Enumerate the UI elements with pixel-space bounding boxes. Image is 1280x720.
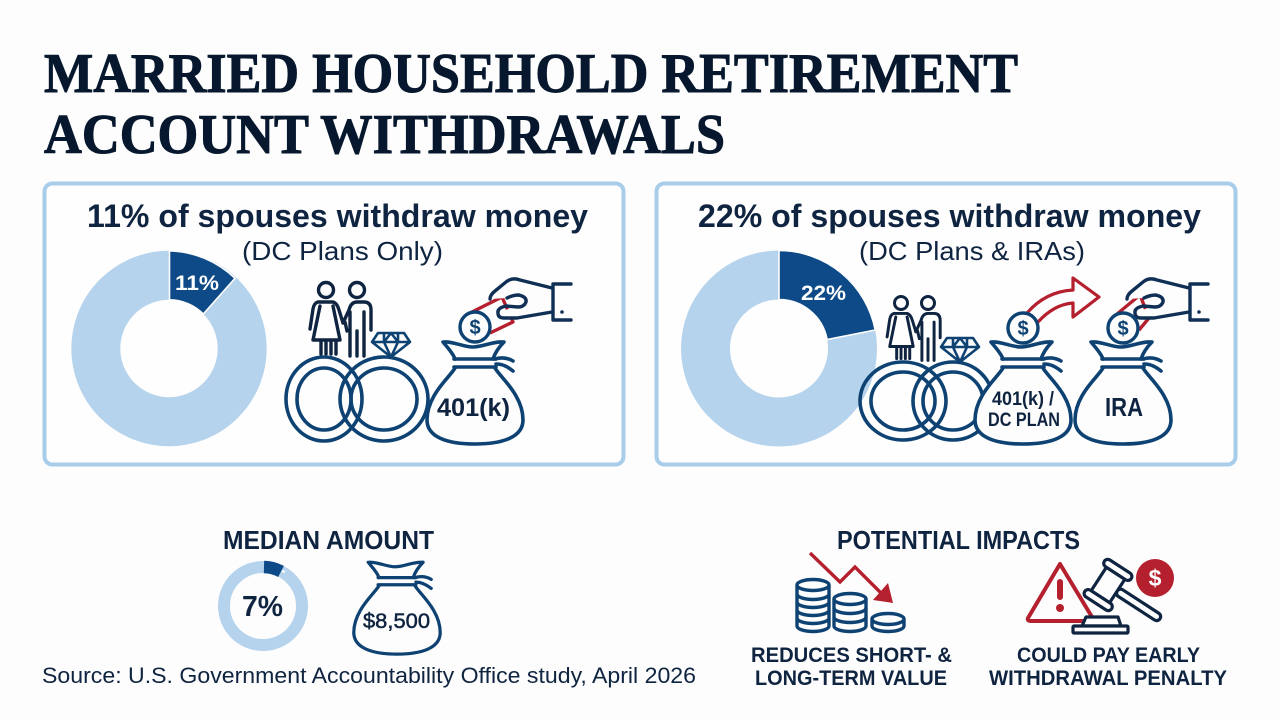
panel heading: 11% of spouses bbox=[87, 198, 588, 266]
title bbox=[44, 43, 1018, 166]
heading: median amount: MEDIAN AMOUNT bbox=[223, 525, 434, 555]
donut chart: 22%: 22% bbox=[801, 282, 846, 305]
label: early withdrawal penalty: WITHDRAWAL PENALTY bbox=[989, 667, 1227, 690]
icon: IRA money bag: IRA bbox=[1105, 392, 1143, 422]
donut chart: 11%: 11% bbox=[175, 272, 219, 295]
panel: DC plans only bbox=[44, 184, 624, 464]
label: early withdrawal penalty bbox=[989, 644, 1227, 690]
label: reduces value: REDUCES SHORT- & bbox=[751, 644, 952, 667]
label: reduces value: LONG-TERM VALUE bbox=[755, 667, 947, 690]
icon: hand placing card bbox=[470, 279, 571, 333]
panel heading: 11% of spouses: 11% of spouses withdraw money bbox=[87, 198, 588, 234]
icon: $8,500 money bag: $8,500 bbox=[363, 610, 430, 633]
icon: warning triangle, gavel and dollar: $ bbox=[1149, 565, 1162, 591]
icon: 401(k) / DC plan money bag: 401(k) / bbox=[992, 389, 1055, 410]
title: MARRIED HOUSEHOLD RETIREMENT bbox=[44, 43, 1018, 105]
panel heading: 11% of spouses: (DC Plans Only) bbox=[242, 236, 443, 266]
panel heading: 22% of spouses: (DC Plans & IRAs) bbox=[859, 236, 1085, 266]
donut chart: 7% bbox=[224, 567, 302, 645]
icon: 401(k) money bag: 401(k) bbox=[437, 394, 510, 422]
donut chart: 11% bbox=[96, 251, 242, 422]
panel: DC plans and IRAs bbox=[656, 184, 1236, 464]
label: early withdrawal penalty: COULD PAY EARLY bbox=[1017, 644, 1200, 667]
label: reduces value bbox=[751, 644, 952, 690]
donut chart: 22% bbox=[706, 250, 875, 422]
icon: 401(k) money bag bbox=[427, 312, 523, 444]
title: ACCOUNT WITHDRAWALS bbox=[44, 104, 725, 166]
icon: couple bbox=[887, 296, 940, 360]
icon: shrinking coin stacks with falling arrow bbox=[797, 553, 904, 632]
panel heading: 22% of spouses bbox=[698, 198, 1201, 266]
icon: wedding rings bbox=[286, 333, 428, 441]
icon: IRA money bag bbox=[1075, 313, 1171, 444]
heading: potential impacts: POTENTIAL IMPACTS bbox=[837, 525, 1080, 555]
arrow: rollover from plan to IRA bbox=[1027, 278, 1099, 322]
panel heading: 22% of spouses: 22% of spouses withdraw money bbox=[698, 198, 1201, 234]
icon: $8,500 money bag bbox=[354, 562, 440, 654]
icon: 401(k) / DC plan money bag: DC PLAN bbox=[988, 410, 1060, 431]
icon: 401(k) / DC plan money bag bbox=[975, 313, 1071, 444]
section: median amount bbox=[223, 525, 440, 654]
icon: warning triangle, gavel and dollar bbox=[1028, 558, 1174, 637]
icon: hand placing card bbox=[1117, 279, 1208, 330]
icon: wedding rings bbox=[860, 338, 993, 440]
icon: couple bbox=[310, 282, 371, 356]
donut chart: 7%: 7% bbox=[242, 591, 283, 623]
section: potential impacts bbox=[751, 525, 1227, 690]
source note: Source: U.S. Government Accountability Office study, April 2026 bbox=[42, 663, 696, 688]
